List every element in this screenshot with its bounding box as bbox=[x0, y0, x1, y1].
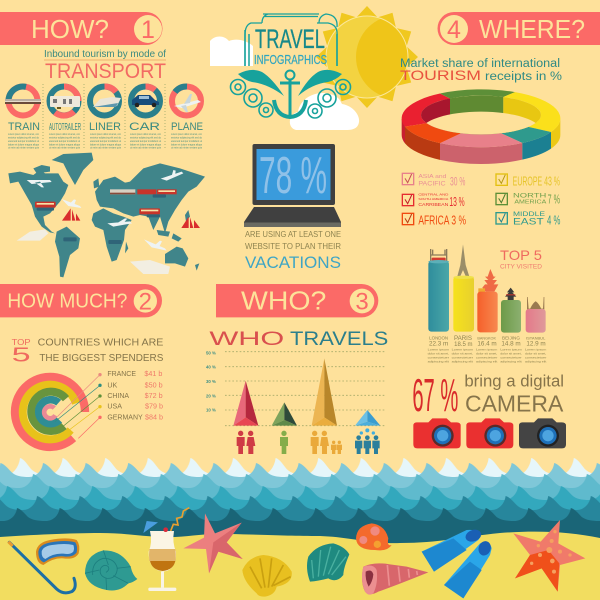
text: website usage: ARE USING AT LEAST ONE bbox=[245, 230, 341, 239]
icon: orange shell bbox=[356, 523, 392, 550]
heading bar: where: WHERE? bbox=[479, 14, 585, 44]
transport: plane: sectetur adipiscing elit sed do bbox=[171, 136, 203, 140]
icon: cocktail bbox=[143, 508, 189, 591]
axis labels: 10 % bbox=[206, 408, 216, 413]
transport: liner bbox=[89, 86, 122, 150]
list: spenders: UK bbox=[107, 382, 118, 389]
bar: istanbul: ISTANBUL bbox=[526, 335, 546, 340]
axis labels bbox=[206, 350, 216, 413]
icon: teal shell bbox=[85, 550, 137, 590]
heading bar: where: 4 bbox=[447, 16, 461, 44]
heading bar: how bbox=[0, 12, 162, 45]
laptop: 78 percent: 78 % bbox=[259, 147, 327, 205]
legend item: north america bbox=[496, 192, 560, 207]
beach items left bbox=[8, 508, 292, 597]
heading: top 5 city visited bbox=[500, 248, 542, 271]
text: website usage: WEBSITE TO PLAN THEIR bbox=[245, 242, 341, 251]
icon: red camera 1 bbox=[413, 418, 461, 448]
transport: car bbox=[129, 86, 162, 150]
axis labels: 30 % bbox=[206, 379, 216, 384]
text: bring a digital camera bbox=[464, 372, 564, 417]
section: top 5 cities: 67 % bbox=[412, 369, 458, 421]
heading bar: how much bbox=[0, 284, 162, 317]
section: top 5 cities bbox=[412, 244, 566, 448]
transport: car: Lorem ipsum dolor sit amet, con bbox=[130, 133, 162, 136]
legend item: central and south america bbox=[402, 193, 465, 209]
map: sailboats bbox=[62, 208, 200, 228]
logo: subtitle text: INFOGRAPHICS bbox=[254, 53, 327, 67]
bar: bangkok bbox=[476, 269, 498, 364]
icon: snorkel bbox=[8, 542, 75, 593]
list: spenders: CHINA bbox=[107, 393, 129, 400]
legend item: north america: 7 % bbox=[548, 193, 560, 207]
bar: paris: 18.5 m bbox=[454, 342, 473, 348]
title: who travels bbox=[209, 329, 388, 350]
pyramid: groups bbox=[355, 410, 380, 426]
heading: top 5 countries: THE BIGGEST SPENDERS bbox=[39, 353, 164, 364]
transport: plane bbox=[171, 86, 203, 150]
list: spenders: FRANCE bbox=[107, 371, 136, 378]
pyramid: solo bbox=[272, 402, 297, 426]
heading bar: how: 1 bbox=[141, 16, 155, 44]
bar: istanbul: consectetuer bbox=[525, 355, 546, 359]
leader lines: spenders bbox=[55, 375, 100, 438]
heading: top 5 city visited: TOP 5 bbox=[500, 248, 542, 263]
section: how (transport): AUTOTRAILER bbox=[49, 121, 81, 133]
heading bar: where bbox=[438, 12, 600, 45]
transport: liner: sectetur adipiscing elit sed do bbox=[90, 136, 122, 140]
transport: liner: ut enim ad minim veniam quis bbox=[90, 146, 122, 150]
list: spenders: $41 b bbox=[144, 371, 162, 378]
transport: train: eiusmod tempor incididunt ut bbox=[8, 140, 39, 143]
legend item: europe: EUROPE 43 % bbox=[513, 174, 560, 188]
beach items right bbox=[307, 520, 585, 598]
bar: istanbul: 12.9 m bbox=[526, 341, 546, 347]
bar: beijing: dolor sit amet, bbox=[500, 351, 522, 355]
bar: bangkok: consectetuer bbox=[476, 355, 497, 359]
transport: car: ut enim ad minim veniam quis bbox=[130, 146, 162, 150]
laptop: 78 percent bbox=[244, 144, 341, 227]
list: spenders: $50 b bbox=[145, 382, 163, 389]
transport: liner: eiusmod tempor incididunt ut bbox=[90, 140, 121, 143]
title: transport: TRANSPORT bbox=[45, 60, 166, 83]
heading: top 5 countries bbox=[12, 337, 164, 367]
legend item: middle east: EAST bbox=[513, 216, 544, 226]
transport: train bbox=[5, 86, 41, 150]
subheading: market share: Market share of international bbox=[400, 58, 560, 70]
legend item: central and south america: CARRIBEAN bbox=[418, 202, 449, 208]
bar: london bbox=[428, 249, 450, 364]
bar: beijing: consectetuer bbox=[500, 355, 522, 359]
text: website usage bbox=[245, 230, 341, 272]
heading bar: how: HOW? bbox=[31, 14, 109, 44]
beach sand bbox=[0, 532, 600, 600]
icon: fin 2 bbox=[444, 539, 493, 598]
transport: autotrailer: Lorem ipsum dolor sit amet, con bbox=[49, 133, 81, 136]
list: spenders: $72 b bbox=[145, 393, 163, 400]
heading bar: who bbox=[216, 284, 378, 317]
subheading: inbound tourism: Inbound tourism by mode of bbox=[44, 49, 166, 60]
transport: plane: PLANE bbox=[171, 121, 203, 133]
legend item: central and south america: 13 % bbox=[449, 195, 465, 209]
bar: paris: PARIS bbox=[454, 336, 472, 342]
bar: london: LONDON bbox=[429, 336, 448, 341]
bar: istanbul: dolor sit amet, bbox=[525, 351, 547, 355]
bar: bangkok: 16.4 m bbox=[477, 341, 497, 347]
legend item: central and south america: CENTRAL AND bbox=[418, 193, 450, 197]
heading bar: how much: HOW MUCH? bbox=[7, 290, 127, 312]
subheading: market share bbox=[400, 58, 562, 83]
sun bbox=[316, 6, 418, 108]
transport: liner: LINER bbox=[89, 121, 121, 133]
pyramid: couples bbox=[233, 381, 258, 426]
donut chart: market share bbox=[402, 89, 560, 164]
text: bring a digital camera: bring a digital bbox=[464, 372, 564, 391]
heading: top 5 countries: COUNTRIES WHICH ARE bbox=[38, 338, 164, 349]
transport: plane: Lorem ipsum dolor sit amet, con bbox=[171, 133, 203, 136]
section: who bbox=[206, 284, 388, 454]
bar: istanbul bbox=[525, 297, 547, 364]
heading: top 5 city visited: CITY VISITED bbox=[500, 264, 542, 271]
title: who travels: WHO bbox=[209, 329, 284, 350]
icon: diving mask bbox=[36, 538, 79, 565]
waves bbox=[0, 458, 600, 568]
icon: red camera 2 bbox=[466, 418, 513, 448]
legend item: central and south america: SOUTH AMERICA bbox=[418, 197, 448, 201]
map: buses bbox=[35, 189, 177, 244]
transport: plane: labore et dolore magna aliqua bbox=[171, 144, 203, 146]
icon: fin 1 bbox=[422, 528, 483, 572]
logo: anchor bbox=[274, 70, 306, 117]
icon: conch bbox=[362, 563, 428, 595]
axis labels: 20 % bbox=[206, 393, 216, 398]
cloud: right bbox=[290, 93, 359, 130]
heading: top 5 countries: 5 bbox=[12, 345, 31, 367]
transport: train: TRAIN bbox=[8, 121, 40, 133]
list: spenders: $84 b bbox=[145, 414, 163, 421]
icon: family bbox=[311, 431, 342, 454]
bar: bangkok: BANGKOK bbox=[477, 335, 496, 340]
bar: bangkok: Lorem ipsum bbox=[476, 347, 498, 351]
bar: istanbul: Lorem ipsum bbox=[525, 347, 547, 351]
bar: paris: adipiscing elit bbox=[452, 360, 473, 364]
legend item: asia and pacific: 30 % bbox=[450, 174, 466, 188]
legend item: middle east: 4 % bbox=[547, 213, 560, 227]
axis labels: 50 % bbox=[206, 350, 216, 355]
bar: beijing: BEIJING bbox=[502, 335, 521, 340]
legend item: europe bbox=[496, 174, 560, 188]
list: spenders: $79 b bbox=[145, 404, 163, 411]
bar: london: Lorem ipsum bbox=[428, 347, 450, 351]
legend item: africa bbox=[402, 213, 466, 228]
legend item: asia and pacific: PACIFIC bbox=[418, 181, 446, 187]
transport: plane: ut enim ad minim veniam quis bbox=[171, 146, 203, 150]
legend item: africa: AFRICA 3 % bbox=[418, 214, 466, 228]
bar: beijing: 14.8 m bbox=[501, 341, 521, 347]
subheading: market share: receipts in % bbox=[485, 71, 562, 83]
bar: paris: consectetuer bbox=[452, 355, 473, 359]
bar: london: 22.3 m bbox=[429, 342, 448, 348]
section: how (transport) bbox=[0, 12, 205, 277]
bar: paris: dolor sit amet, bbox=[452, 351, 473, 355]
transport: car: labore et dolore magna aliqua bbox=[130, 144, 162, 146]
legend item: asia and pacific: ASIA and bbox=[418, 174, 446, 180]
bar: bangkok: adipiscing elit bbox=[476, 360, 498, 364]
logo: dolphins bbox=[238, 70, 342, 96]
title: who travels: TRAVELS bbox=[290, 329, 388, 350]
legend: market share bbox=[402, 173, 560, 228]
pyramid: families bbox=[312, 358, 337, 426]
transport: autotrailer: sectetur adipiscing elit sed do bbox=[49, 136, 81, 140]
icon: group bbox=[355, 428, 380, 454]
heading bar: how much: 2 bbox=[139, 289, 152, 316]
bar: bangkok: dolor sit amet, bbox=[476, 351, 498, 355]
transport: car: sectetur adipiscing elit sed do bbox=[130, 136, 162, 140]
radial bar chart: spenders bbox=[15, 377, 85, 447]
subheading: market share: TOURISM bbox=[400, 67, 481, 83]
list: spenders: GERMANY bbox=[107, 414, 143, 421]
bar: london: dolor sit amet, bbox=[428, 351, 449, 355]
list: spenders: USA bbox=[107, 404, 122, 411]
transport: autotrailer: labore et dolore magna aliqua bbox=[49, 144, 81, 146]
bar: beijing: Lorem ipsum bbox=[500, 347, 522, 351]
transport: train: labore et dolore magna aliqua bbox=[8, 144, 40, 146]
bar: paris bbox=[452, 244, 474, 364]
transport: train: Lorem ipsum dolor sit amet, con bbox=[8, 133, 40, 136]
icon: couple bbox=[237, 431, 255, 454]
icon: teal scallop bbox=[307, 543, 349, 582]
transport: autotrailer: ut enim ad minim veniam quis bbox=[49, 146, 81, 150]
cloud: left bbox=[210, 36, 253, 66]
icon: dark camera bbox=[519, 418, 566, 448]
legend item: middle east: MIDDLE bbox=[513, 211, 545, 218]
bar: london: consectetuer bbox=[428, 355, 449, 359]
bar: london: adipiscing elit bbox=[428, 360, 449, 364]
bar: beijing bbox=[500, 288, 522, 364]
transport: liner: Lorem ipsum dolor sit amet, con bbox=[90, 133, 122, 136]
world map bbox=[8, 153, 205, 277]
text: website usage: VACATIONS bbox=[245, 253, 341, 272]
heading bar: who: 3 bbox=[355, 289, 369, 316]
legend item: north america: NORTH bbox=[513, 192, 547, 199]
transport: autotrailer bbox=[49, 86, 81, 150]
axis labels: 40 % bbox=[206, 365, 216, 370]
legend item: middle east bbox=[496, 211, 560, 227]
section: where bbox=[400, 12, 600, 228]
map: planes bbox=[27, 170, 183, 251]
text: bring a digital camera: CAMERA bbox=[465, 391, 564, 417]
icon: yellow scallop bbox=[242, 555, 292, 597]
legend item: asia and pacific bbox=[402, 173, 466, 188]
transport: train: sectetur adipiscing elit sed do bbox=[8, 136, 40, 140]
bar: beijing: adipiscing elit bbox=[500, 360, 522, 364]
transport: autotrailer: eiusmod tempor incididunt ut bbox=[49, 140, 80, 143]
icon: pink starfish bbox=[183, 513, 243, 573]
logo: spirals bbox=[230, 80, 350, 118]
transport: car: CAR bbox=[129, 121, 160, 133]
map: ships bbox=[17, 229, 170, 274]
legend item: north america: AMERICA bbox=[514, 200, 547, 206]
transport: car: eiusmod tempor incididunt ut bbox=[130, 140, 161, 143]
transport: train: ut enim ad minim veniam quis bbox=[8, 146, 40, 150]
icon: orange starfish bbox=[513, 520, 585, 592]
logo: travel infographics bbox=[230, 14, 350, 118]
transport: liner: labore et dolore magna aliqua bbox=[90, 144, 122, 146]
bar: istanbul: adipiscing elit bbox=[525, 360, 547, 364]
transport: plane: eiusmod tempor incididunt ut bbox=[171, 140, 202, 143]
section: how much bbox=[0, 284, 164, 447]
bar: paris: Lorem ipsum bbox=[452, 347, 474, 351]
icon: single person bbox=[280, 431, 288, 454]
heading bar: who: WHO? bbox=[241, 285, 326, 315]
list: spenders bbox=[98, 371, 163, 421]
logo: title text: TRAVEL bbox=[255, 24, 325, 54]
heading: top 5 countries: TOP bbox=[12, 337, 31, 347]
